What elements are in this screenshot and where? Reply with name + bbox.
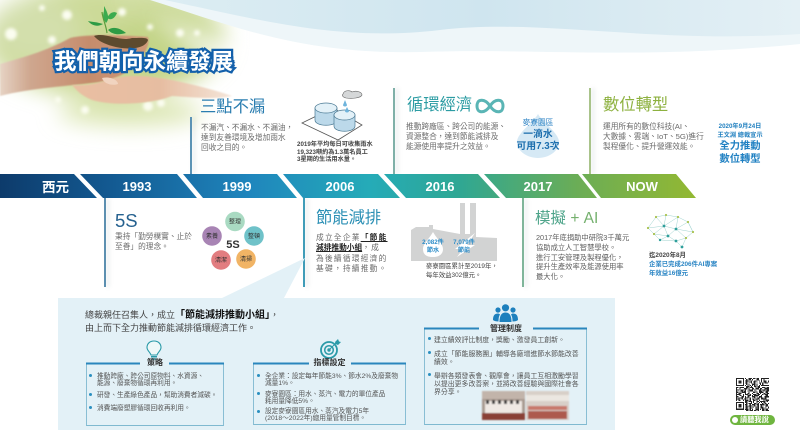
rainwater caption: 19,323噸約為1.3萬名員工 [297,148,368,156]
bullet text: 全企業：設定每年節能3%、節水2%及廢棄物 [265,373,398,380]
bullet dot [257,392,260,395]
factory caption: 每年效益302億元。 [426,272,481,279]
bullet text [265,373,398,388]
AI caption [649,252,717,277]
announcement date [717,122,763,138]
bullet text [434,373,579,396]
icon: rainwater tanks [301,90,363,140]
bullet text: 消費端廢塑膠循環回收再利用。 [97,405,191,412]
water saving count: 節水 [427,247,439,254]
body text: 推動跨廠區、跨公司的能源、 [406,122,506,131]
bullet list [89,372,217,412]
QR code [736,378,769,411]
energy saving count: 節能 [458,247,470,254]
announcement headline: 數位轉型 [719,154,761,164]
callout: announcement [717,122,763,164]
panel: 節能減排 [303,198,498,287]
drop text: 麥寮園區 [523,118,553,127]
heading: 三點不漏 [200,98,265,116]
intro text: 由上而下全力推動節能減排循環經濟工作。 [85,323,256,333]
body text: 基礎，持續推動。 [316,264,388,273]
announcement headline: 全力推動 [719,141,761,152]
saving figures [422,238,475,254]
bullet text: 績效。 [434,359,455,366]
icon: factory [411,203,497,261]
panel: 節能減排推動小組 detail [58,258,615,430]
rainwater caption [297,140,373,163]
card title: 策略 [147,358,163,367]
factory caption [426,262,498,279]
5S diagram: 整理 [229,218,241,226]
AI caption: 迄2020年8月 [649,252,686,259]
year 2016: 2016 [426,179,454,194]
energy saving count: 7,079件 [453,239,475,246]
title: 我們朝向永續發展 [54,49,233,74]
announcement date: 2020年9月24日 [719,123,761,130]
body text [115,232,192,251]
bullet text [97,372,204,387]
icon: target [319,339,341,359]
bullet text: (2018～2022年)總用量管制目標。 [265,415,366,422]
card: 策略 [86,340,224,426]
drop figure: 可用7.3次 [516,140,560,152]
AI caption: 企業已完成206件AI專案 [649,261,717,268]
bullet text: 耗用量降低5%。 [265,398,315,405]
panel rule [303,198,305,287]
event photos [482,391,570,420]
5S diagram [202,212,264,270]
timeline band [0,174,696,198]
icon: speaker [732,417,738,423]
announcement headline [719,140,761,164]
bullet dot [89,374,92,377]
bullet text: 設定麥寮園區用水、蒸汽及電力5年 [265,408,369,415]
card frame [424,324,588,426]
body text [406,122,506,151]
body text: 不漏汽、不漏水、不漏油， [201,123,293,132]
body text [201,123,293,152]
body text: 秉持「勤勞樸實、止於 [115,232,192,241]
card frame [253,359,406,427]
heading: 循環經濟 [407,96,472,114]
body text: 進行工安管理及製程優化， [536,253,624,262]
5S diagram: 清潔 [215,256,227,264]
bullet text: 成立「節能服務團」輔導各廠增進節水節能改善 [434,351,579,358]
announcement date: 王文淵 總裁宣示 [717,132,763,138]
panel rule [190,117,192,174]
bullet text: 麥寮園區：用水、蒸汽、電力的單位產品 [265,391,385,398]
bullet text: 舉辦各類發表會、觀摩會，讓員工互相激勵學習 [434,373,579,380]
panel rule [522,198,524,287]
body text: 為後續循環經濟的 [316,254,388,263]
card frame [86,362,224,426]
body text [316,233,388,273]
intro text: 總裁親任召集人，成立「節能減排推動小組」， [85,310,279,321]
heading: 5S [115,210,138,231]
bullet dot [89,393,92,396]
card: 指標設定 [253,339,406,427]
card title: 管理制度 [490,324,522,333]
5S diagram: 整頓 [248,232,260,240]
year 2017: 2017 [524,179,552,194]
drop figure: 一滴水 [523,129,553,140]
bullet text: 界分享。 [434,389,462,396]
body text: 至善」的理念。 [115,242,169,251]
body text: 協助成立人工智慧學校。 [536,243,616,252]
bullet list [424,334,588,424]
body text: 資源整合，達到節能減排及 [406,132,498,141]
panel rule [589,88,591,174]
body text: 最大化。 [536,272,565,281]
body text: 達到友善環境及增加雨水 [201,133,286,142]
body text: 運用所有的數位科技(AI、 [603,122,690,131]
heading: 節能減排 [316,209,381,227]
panel: 模擬+AI [522,198,717,287]
drop figure [516,128,560,152]
bullet dot [257,410,260,413]
5S diagram: 素養 [206,232,218,240]
year now: NOW [626,179,658,194]
water saving count: 2,082件 [422,239,444,246]
panel: 5S [104,198,264,287]
water saving count [422,238,444,254]
energy saving count [453,238,475,254]
card title: 指標設定 [314,358,346,367]
bullet dot [428,337,431,340]
body text: 減排推動小組，成 [316,243,380,252]
heading: 數位轉型 [603,96,668,114]
button label: 請聽我說 [740,415,769,424]
timeline arrows [0,174,696,198]
body text [603,122,704,151]
body text [536,233,629,281]
5S diagram: 清掃 [240,255,252,263]
year 2006: 2006 [326,179,354,194]
panel: 循環經濟 [393,88,560,174]
year 1993: 1993 [123,179,151,194]
body text: 回收之目的。 [201,143,247,152]
bullet text: 推動跨廠、跨公司原物料、水資源、 [97,373,204,380]
heading: 模擬 + AI [535,210,598,227]
panel rule [104,198,106,287]
bullet text: 建立績效評比制度，獎勵、激發員工創新。 [434,337,565,344]
callout: water drop [516,114,560,158]
intro text [85,309,279,333]
rainwater caption: 2019年平均每日可收集雨水 [297,141,373,148]
panel rule [393,88,395,174]
bullet dot [89,406,92,409]
year 1999: 1999 [223,179,251,194]
bullet text: 能源、廢棄物循環再利用。 [97,380,177,387]
icon: light bulb [146,340,162,360]
button: 請聽我說 [730,415,775,425]
body text: 製程優化、提升營運效能。 [603,142,695,151]
AI caption: 年效益16億元 [649,270,688,277]
body text: 能源使用率提升之效益。 [406,142,491,151]
icon: AI brain network [646,214,694,248]
bullet dot [428,373,431,376]
body text: 大數據、雲端、IoT、5G)進行 [603,132,704,141]
5S diagram: 5S [226,239,240,251]
icon: infinity [476,98,504,114]
bullet text [434,351,579,367]
bullet text: 研發、生產綠色產品，幫助消費者減碳。 [97,392,217,399]
body text: 成立全企業「節能 [316,233,388,242]
bullet dot [257,374,260,377]
panel: 三點不漏 [190,90,373,174]
era label: 西元 [42,180,69,195]
card: 管理制度 [424,304,588,426]
icon: water drop [517,114,559,158]
bullet dot [428,351,431,354]
icon: people [493,304,518,323]
bullet text [265,408,369,422]
bullet text: 減量1%。 [265,380,295,387]
bullet list [253,370,406,425]
callout pointer and panel background [58,258,615,430]
bullet text [265,391,385,406]
factory caption: 麥寮園區累計至2019年， [426,263,498,270]
bullet text: 以提出更多改善案，並將改善經驗與國際社會各 [434,381,579,388]
panel: 數位轉型 [589,88,763,174]
body text: 2017年底捐助中研院3千萬元 [536,233,629,242]
rainwater caption: 3星期的生活用水量。 [297,156,356,163]
body text: 提升生產效率及能源使用率 [536,262,624,271]
